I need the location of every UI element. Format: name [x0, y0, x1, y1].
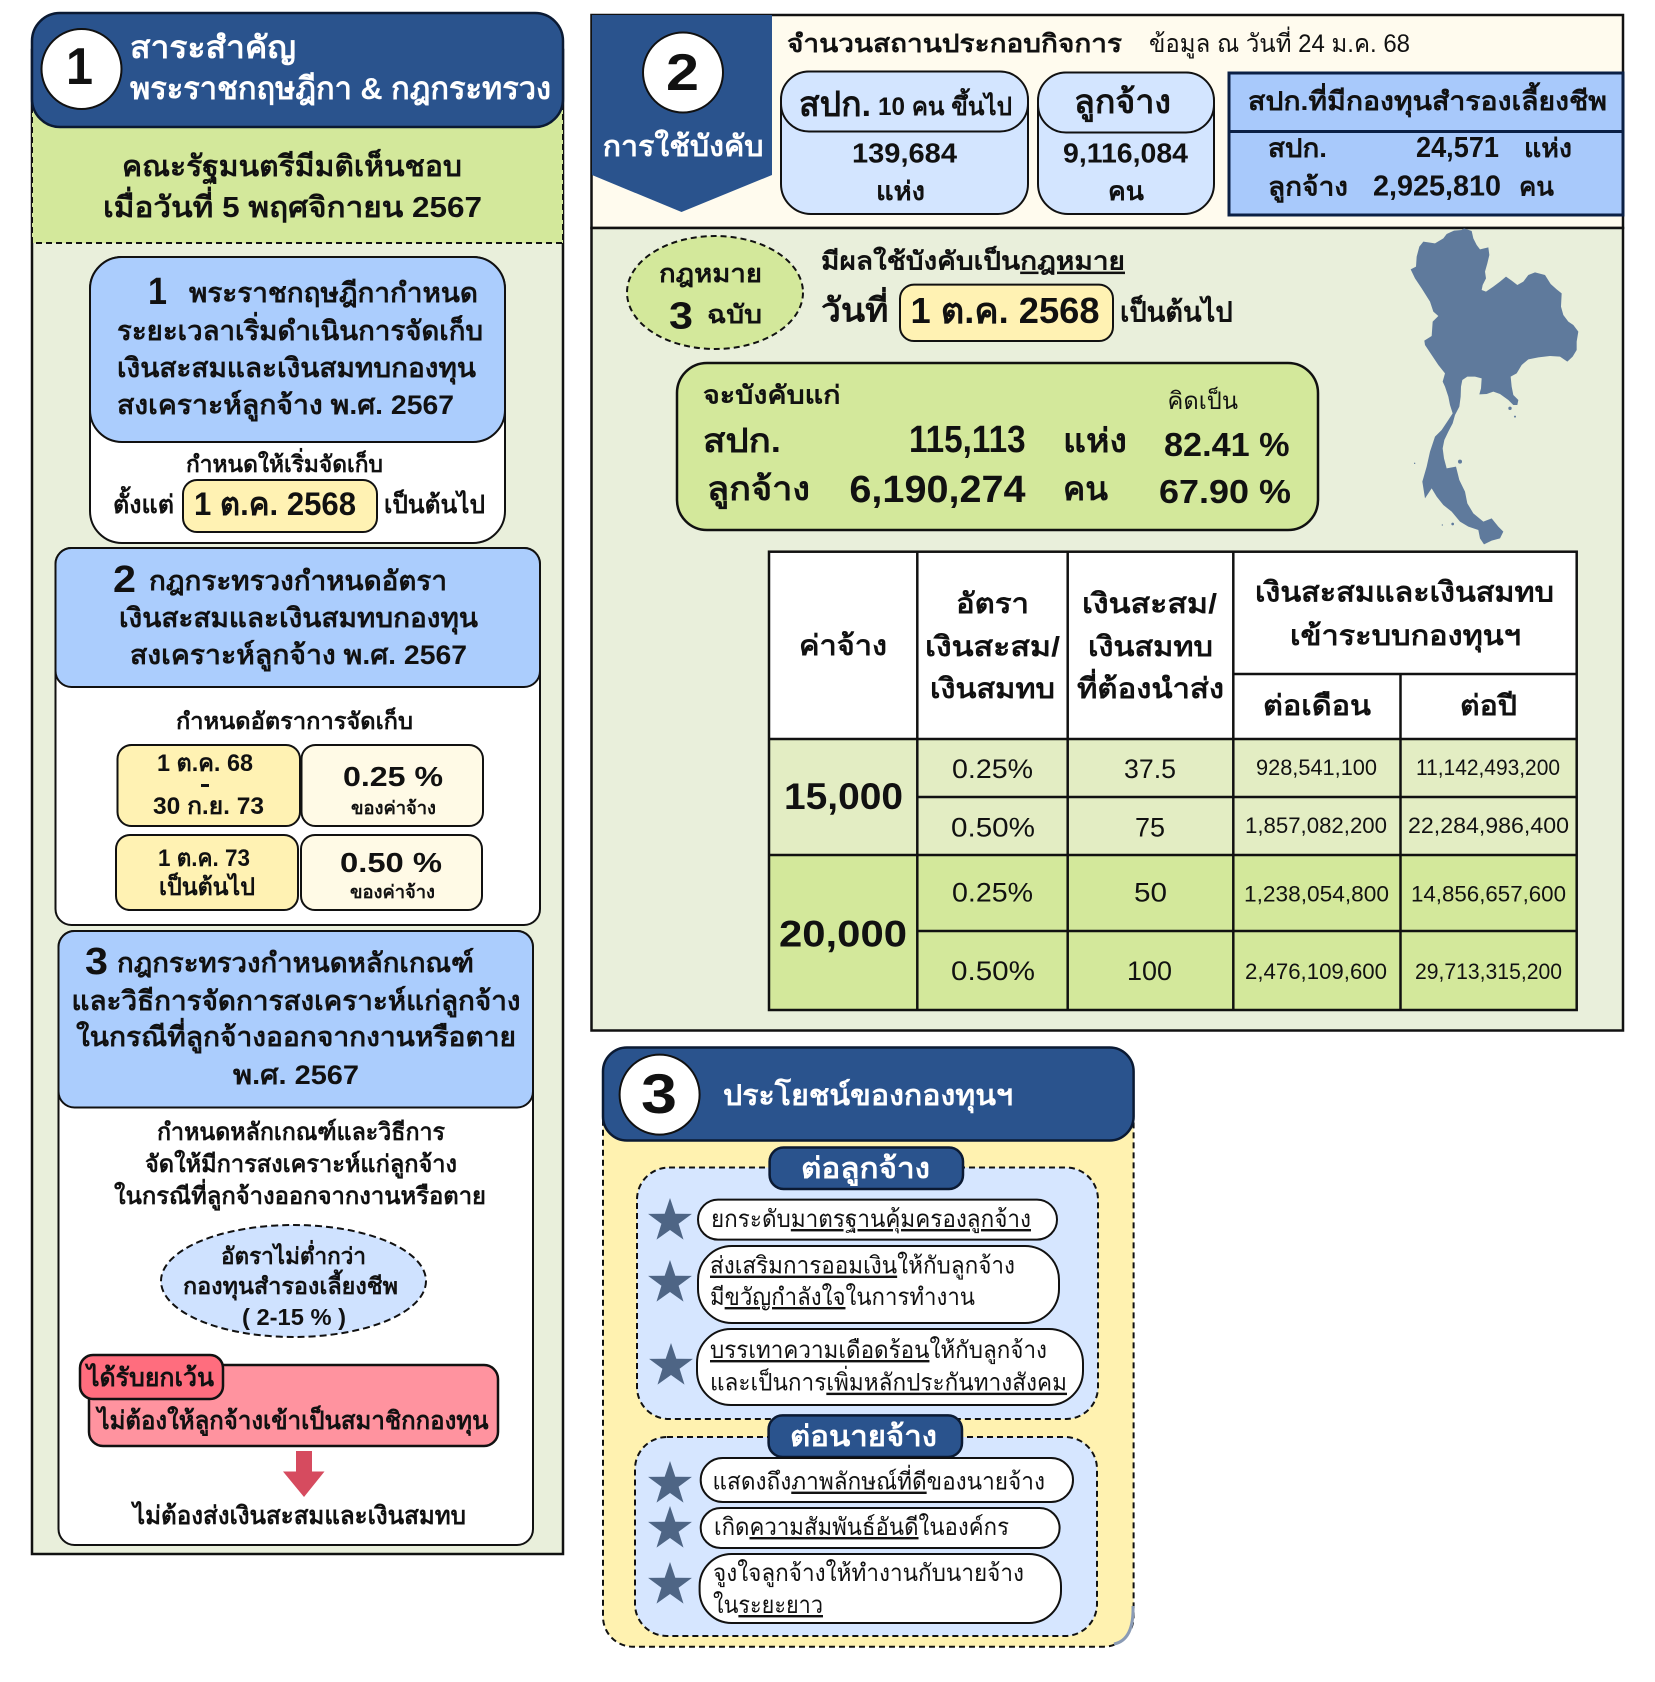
benefit 5 — [701, 1508, 1060, 1548]
dashed oval: 3 laws: 3 — [669, 296, 693, 338]
dashed ellipse: rate: ( 2-15 % ) — [242, 1304, 346, 1330]
employees box — [1038, 72, 1214, 214]
top band: establishment counts — [592, 15, 1623, 228]
panel 3: benefits — [603, 1048, 1134, 1647]
pennant heading — [592, 15, 772, 212]
benefit 6: จูงใจลูกจ้างให้ทำงานกับนายจ้าง — [713, 1559, 1024, 1588]
star — [648, 1562, 692, 1604]
table row values: 29,713,315,200 — [1415, 959, 1562, 984]
benefit 4 — [701, 1458, 1073, 1502]
table row values — [779, 754, 1569, 986]
provident fund box: สปก. — [1268, 133, 1327, 163]
establishments box: 139,684 — [852, 138, 957, 168]
law 3 card: 3 — [85, 941, 108, 983]
coverage box: 115,113 — [909, 419, 1026, 461]
coverage box — [677, 363, 1318, 530]
provident fund box: สปก.ที่มีกองทุนสำรองเลี้ยงชีพ — [1248, 81, 1607, 118]
benefit 6 — [700, 1554, 1061, 1623]
panel 3 header — [603, 1048, 1134, 1140]
coverage box: ลูกจ้าง — [707, 470, 810, 510]
establishments box: แห่ง — [876, 176, 925, 206]
effective date: 1 ต.ค. 2568 — [910, 290, 1100, 331]
table row values: 2,476,109,600 — [1245, 959, 1387, 984]
table row values: 0.50% — [951, 956, 1035, 986]
table row values: 1,857,082,200 — [1245, 813, 1387, 838]
law 1 card: 1 — [148, 271, 167, 313]
pennant heading: 2 — [666, 44, 699, 102]
law 2 card: 2 — [113, 559, 136, 601]
effective date: วันที่ — [821, 286, 888, 328]
law 2 card — [56, 548, 540, 925]
panel 1 header: 1 — [66, 38, 93, 96]
dashed ellipse: rate — [161, 1225, 426, 1337]
law 2 card: กำหนดอัตราการจัดเก็บ — [176, 706, 413, 734]
establishments box: 10 คน ขึ้นไป — [878, 87, 1012, 121]
corner artifact — [1114, 1606, 1133, 1644]
table row values: 15,000 — [784, 776, 903, 817]
table header text: ต่อเดือน — [1263, 690, 1371, 721]
panel 1: key points — [32, 13, 563, 1554]
table row values: 22,284,986,400 — [1408, 813, 1569, 838]
table row values: 75 — [1135, 813, 1165, 843]
dashed oval: 3 laws: กฎหมาย — [659, 260, 762, 288]
benefit 4: แสดงถึงภาพลักษณ์ที่ดีของนายจ้าง — [712, 1465, 1045, 1496]
rate period 2 — [116, 835, 298, 910]
benefit 5: เกิดความสัมพันธ์อันดีในองค์กร — [714, 1513, 1009, 1541]
star — [648, 1260, 692, 1302]
star — [648, 1198, 692, 1240]
table header text: ค่าจ้าง — [799, 630, 887, 661]
coverage box: คิดเป็น — [1168, 386, 1238, 415]
panel 1 header: พระราชกฤษฎีกา & กฎกระทรวง — [130, 71, 551, 106]
rate period 1 — [118, 745, 300, 826]
law 3 card: ในกรณีที่ลูกจ้างออกจากงานหรือตาย — [76, 1017, 516, 1054]
law 1 card — [90, 257, 505, 543]
green cabinet approval band: เมื่อวันที่ 5 พฤศจิกายน 2567 — [103, 186, 482, 224]
provident fund box: แห่ง — [1524, 133, 1572, 163]
establishments box: สปก. — [799, 85, 871, 124]
dashed oval: 3 laws: ฉบับ — [707, 301, 762, 329]
pennant heading: การใช้บังคับ — [603, 129, 764, 163]
law 1 card: เป็นต้นไป — [384, 489, 485, 519]
table row values: 50 — [1134, 878, 1167, 908]
coverage box: คน — [1063, 470, 1108, 507]
table header text: เงินสมทบ — [930, 673, 1055, 704]
law 1 card: พระราชกฤษฎีกากำหนด — [189, 278, 478, 308]
table row values: 37.5 — [1124, 754, 1176, 784]
table header text — [799, 577, 1554, 721]
coverage box: จะบังคับแก่ — [703, 382, 840, 410]
provident fund box: 24,571 — [1416, 132, 1499, 164]
table header text: เข้าระบบกองทุนฯ — [1290, 620, 1521, 653]
law 1 card: สงเคราะห์ลูกจ้าง พ.ศ. 2567 — [117, 389, 454, 422]
rate 0.50 percent: 0.50 % — [340, 847, 442, 878]
criteria description: กำหนดหลักเกณฑ์และวิธีการ — [157, 1118, 445, 1146]
lower area: legal effect — [592, 228, 1623, 1030]
benefit 1: ยกระดับมาตรฐานคุ้มครองลูกจ้าง — [711, 1206, 1031, 1234]
law 2 card: สงเคราะห์ลูกจ้าง พ.ศ. 2567 — [130, 639, 467, 672]
law 3 card: และวิธีการจัดการสงเคราะห์แก่ลูกจ้าง — [72, 985, 520, 1018]
star — [648, 1506, 692, 1548]
provident fund box: คน — [1519, 172, 1554, 202]
benefit 2 — [698, 1246, 1059, 1323]
law 1 card: กำหนดให้เริ่มจัดเก็บ — [186, 447, 383, 477]
law 2 card: กฎกระทรวงกำหนดอัตรา — [149, 566, 447, 596]
criteria description: ในกรณีที่ลูกจ้างออกจากงานหรือตาย — [114, 1178, 486, 1211]
table row values: 100 — [1127, 956, 1172, 986]
panel 2: enforcement — [592, 15, 1623, 1030]
exemption box: ไม่ต้องให้ลูกจ้างเข้าเป็นสมาชิกกองทุน — [95, 1405, 489, 1437]
counts heading — [787, 26, 1410, 59]
benefit 6: ในระยะยาว — [713, 1591, 823, 1619]
group: for employees: ต่อลูกจ้าง — [801, 1153, 930, 1186]
dashed ellipse: rate: กองทุนสำรองเลี้ยงชีพ — [183, 1269, 398, 1301]
table header text: เงินสะสมและเงินสมทบ — [1255, 577, 1554, 608]
panel 3 header: 3 — [641, 1062, 677, 1125]
effective date: เป็นต้นไป — [1120, 294, 1233, 327]
dashed ellipse: rate: อัตราไม่ต่ำกว่า — [221, 1239, 366, 1269]
criteria description: จัดให้มีการสงเคราะห์แก่ลูกจ้าง — [145, 1149, 457, 1179]
table row values: 928,541,100 — [1256, 755, 1377, 780]
group: for employers: ต่อนายจ้าง — [790, 1421, 937, 1453]
panel 1 header: สาระสำคัญ — [130, 30, 296, 66]
coverage box: 6,190,274 — [849, 469, 1026, 511]
group: for employees — [637, 1148, 1098, 1419]
benefit 3: บรรเทาความเดือดร้อนให้กับลูกจ้าง — [710, 1336, 1047, 1365]
counts heading: จำนวนสถานประกอบกิจการ — [787, 30, 1123, 58]
rate 0.25 percent: ของค่าจ้าง — [351, 798, 436, 818]
rate 0.50 percent: ของค่าจ้าง — [350, 882, 435, 902]
table header text: เงินสมทบ — [1088, 631, 1213, 662]
table header text: อัตรา — [956, 588, 1029, 619]
rate 0.25 percent: 0.25 % — [343, 761, 443, 792]
rate 0.50 percent — [301, 835, 482, 910]
coverage box: แห่ง — [1063, 422, 1127, 459]
law 3 card — [58, 931, 533, 1545]
arrow: down — [283, 1451, 324, 1497]
law 1 card: เงินสะสมและเงินสมทบกองทุน — [117, 353, 477, 385]
table row values: 20,000 — [779, 914, 907, 955]
no contributions note: ไม่ต้องส่งเงินสะสมและเงินสมทบ — [130, 1500, 466, 1530]
table row values: 11,142,493,200 — [1416, 755, 1560, 780]
benefit 3: และเป็นการเพิ่มหลักประกันทางสังคม — [710, 1366, 1067, 1397]
law 3 card: พ.ศ. 2567 — [233, 1060, 359, 1090]
rate period 2: 1 ต.ค. 73 — [158, 845, 250, 872]
star — [649, 1343, 693, 1385]
benefit 1 — [698, 1200, 1057, 1240]
rate period 2: เป็นต้นไป — [159, 872, 255, 901]
effective date — [821, 246, 1233, 341]
law 3 card: กฎกระทรวงกำหนดหลักเกณฑ์ — [117, 947, 474, 978]
provident fund box — [1229, 73, 1623, 215]
group: for employers — [635, 1415, 1097, 1636]
benefit 3 — [697, 1329, 1083, 1405]
establishments box — [781, 72, 1028, 214]
provident fund box: 2,925,810 — [1373, 171, 1501, 203]
table header text: เงินสะสม/ — [925, 631, 1060, 662]
benefit 2: มีขวัญกำลังใจในการทำงาน — [710, 1283, 975, 1311]
green cabinet approval band: คณะรัฐมนตรีมีมติเห็นชอบ — [122, 148, 462, 185]
law 1 card: ตั้งแต่ — [113, 485, 174, 519]
exemption box: ได้รับยกเว้น — [84, 1362, 214, 1392]
table row values: 0.25% — [952, 878, 1033, 908]
criteria description — [114, 1118, 486, 1211]
law 1 card: 1 ต.ค. 2568 — [194, 486, 356, 522]
contributions table — [769, 552, 1577, 1010]
table row values: 14,856,657,600 — [1411, 882, 1566, 907]
panel 3 header: ประโยชน์ของกองทุนฯ — [723, 1077, 1013, 1113]
table row values: 0.25% — [952, 754, 1033, 784]
exemption box — [80, 1355, 498, 1446]
coverage box: 67.90 % — [1159, 473, 1291, 510]
rate period 1: 1 ต.ค. 68 — [157, 750, 253, 777]
coverage box: สปก. — [703, 422, 781, 459]
table grid — [769, 552, 1577, 1010]
benefit 2: ส่งเสริมการออมเงินให้กับลูกจ้าง — [710, 1252, 1015, 1281]
table header text: ที่ต้องนำส่ง — [1077, 668, 1224, 704]
coverage box: 82.41 % — [1164, 426, 1290, 463]
rate period 1: 30 ก.ย. 73 — [153, 793, 264, 820]
table fills — [769, 552, 1577, 1010]
law 2 card: เงินสะสมและเงินสมทบกองทุน — [119, 603, 479, 635]
employees box: 9,116,084 — [1063, 138, 1188, 168]
green cabinet approval band — [32, 105, 563, 243]
effective date: มีผลใช้บังคับเป็น กฎหมาย — [821, 246, 1125, 276]
table header text: เงินสะสม/ — [1082, 588, 1217, 619]
map of Thailand — [1411, 228, 1578, 544]
star — [648, 1461, 692, 1503]
rate 0.25 percent — [302, 745, 483, 826]
table row values: 0.50% — [951, 813, 1035, 843]
law 1 card: ระยะเวลาเริ่มดำเนินการจัดเก็บ — [117, 311, 483, 346]
provident fund box: ลูกจ้าง — [1268, 172, 1348, 204]
dashed oval: 3 laws — [627, 236, 803, 349]
table row values: 1,238,054,800 — [1244, 882, 1389, 907]
table header text: ต่อปี — [1460, 690, 1517, 721]
employees box: คน — [1108, 176, 1144, 206]
employees box: ลูกจ้าง — [1074, 83, 1171, 123]
panel 1 header — [32, 13, 563, 127]
counts heading: ข้อมูล ณ วันที่ 24 ม.ค. 68 — [1149, 26, 1410, 59]
